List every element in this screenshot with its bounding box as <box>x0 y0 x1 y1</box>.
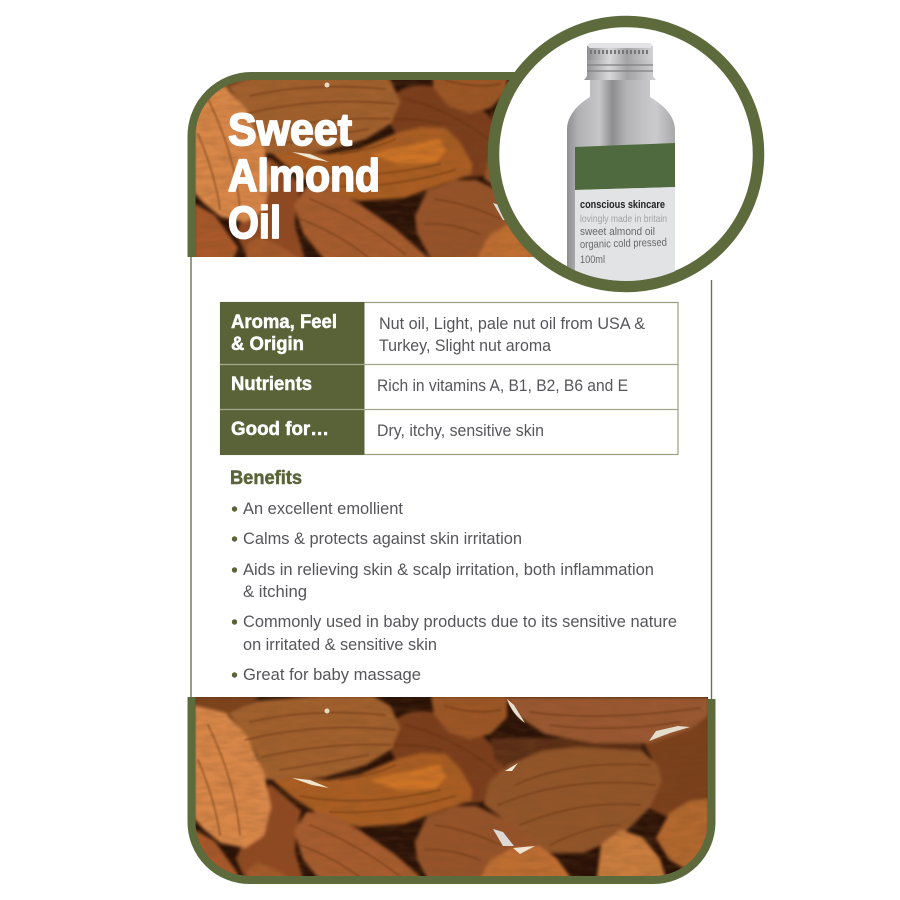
row: aroma, feel and origin: Nut oil, Light, pale nut oil from USA & <box>379 314 646 333</box>
bottle white label: sweet almond oil <box>580 226 655 238</box>
bottle white label <box>575 187 675 285</box>
row: nutrients: Rich in vitamins A, B1, B2, B6 and E <box>377 376 628 395</box>
panel: header almond photo <box>196 80 534 257</box>
info table <box>220 302 678 455</box>
benefits list: on irritated & sensitive skin <box>243 635 437 654</box>
panel: side rules <box>191 255 712 700</box>
bottle white label: conscious skincare <box>580 199 665 211</box>
panel: footer almond photo <box>196 697 708 876</box>
benefits list: Commonly used in baby products due to its sensitive nature <box>243 612 677 631</box>
bottle white label: organic cold pressed <box>580 237 667 251</box>
product circle with bottle <box>494 22 758 286</box>
benefits heading: Benefits <box>230 468 302 489</box>
benefits list <box>232 499 677 684</box>
panel: footer frame <box>192 697 712 880</box>
title <box>228 104 380 248</box>
benefits list: Aids in relieving skin & scalp irritation, both inflammation <box>243 560 654 579</box>
bottle <box>567 43 675 285</box>
benefits list: & itching <box>243 582 307 601</box>
row: good for <box>231 419 544 440</box>
title: Oil <box>228 197 281 248</box>
bottle white label: 100ml <box>580 254 605 266</box>
bottle body <box>567 80 675 285</box>
title: Almond <box>228 150 380 201</box>
row: aroma, feel and origin: Turkey, Slight nut aroma <box>379 336 551 355</box>
benefits list: An excellent emollient <box>243 499 403 518</box>
benefits list: Great for baby massage <box>243 665 421 684</box>
row: good for: Dry, itchy, sensitive skin <box>377 421 544 440</box>
bottle green band <box>575 143 675 190</box>
row: good for: Good for… <box>231 419 329 440</box>
benefits list: Calms & protects against skin irritation <box>243 529 522 548</box>
title: Sweet <box>228 104 352 155</box>
bottle white label: lovingly made in britain <box>580 213 667 225</box>
panel: header frame <box>192 76 530 257</box>
row: aroma, feel and origin: Aroma, Feel <box>231 312 337 333</box>
row: aroma, feel and origin <box>231 312 646 355</box>
row: nutrients: Nutrients <box>231 374 312 395</box>
row: aroma, feel and origin: & Origin <box>231 334 304 355</box>
row: nutrients <box>231 374 628 395</box>
bottle cap <box>584 43 656 80</box>
